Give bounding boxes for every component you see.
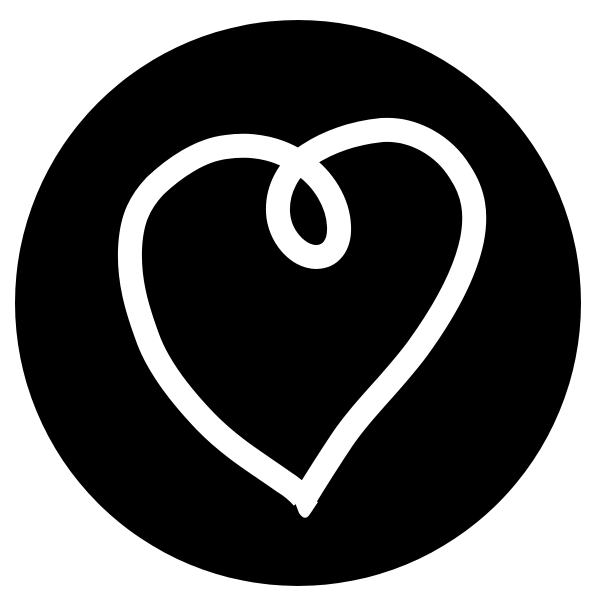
white hand-drawn looped heart [130, 130, 474, 518]
